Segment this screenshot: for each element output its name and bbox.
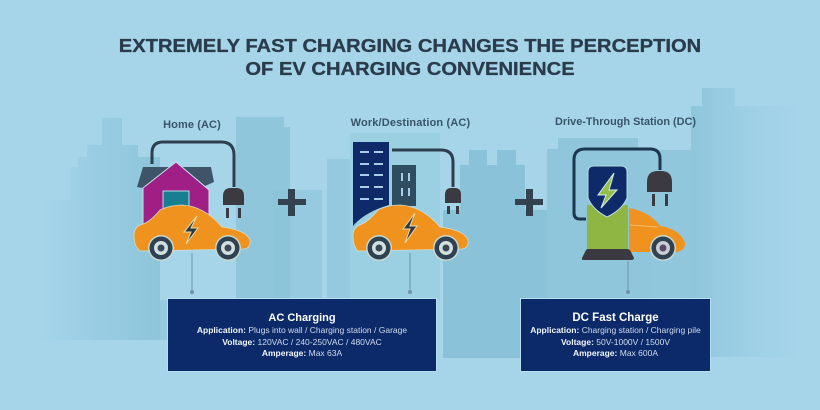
panel: DC fast charge: Application: Charging station / Charging pile xyxy=(530,325,701,335)
icon: work charging scene xyxy=(353,142,468,261)
title: EXTREMELY FAST CHARGING CHANGES THE PERCEPTION xyxy=(119,36,701,56)
title: OF EV CHARGING CONVENIENCE xyxy=(245,59,575,79)
icon: drive-through charging scene xyxy=(574,149,685,261)
cable xyxy=(152,142,234,187)
panel: AC charging: Application: Plugs into wall / Charging station / Garage xyxy=(197,325,407,335)
plus sign 1 xyxy=(278,189,306,216)
title xyxy=(119,36,701,79)
icon: car xyxy=(134,205,250,261)
panel: AC charging: Voltage: 120VAC / 240-250VAC / 480VAC xyxy=(222,337,382,347)
icon: home charging scene xyxy=(134,142,250,261)
panel: AC charging: AC Charging xyxy=(268,312,336,324)
icon: house xyxy=(137,162,214,225)
connector lines xyxy=(190,253,630,294)
label: drive-through: Drive-Through Station (DC) xyxy=(555,116,696,128)
label: home: Home (AC) xyxy=(163,119,221,131)
label: work: Work/Destination (AC) xyxy=(351,117,470,129)
plus sign 2 xyxy=(515,189,543,216)
panel: DC fast charge: Voltage: 50V-1000V / 1500V xyxy=(561,337,670,347)
panel: AC charging xyxy=(167,298,437,372)
panel: DC fast charge: DC Fast Charge xyxy=(572,312,659,324)
panel: DC fast charge xyxy=(520,298,711,372)
icon: plug xyxy=(223,188,244,218)
panel: DC fast charge: Amperage: Max 600A xyxy=(573,348,658,358)
panel: AC charging: Amperage: Max 63A xyxy=(262,348,342,358)
